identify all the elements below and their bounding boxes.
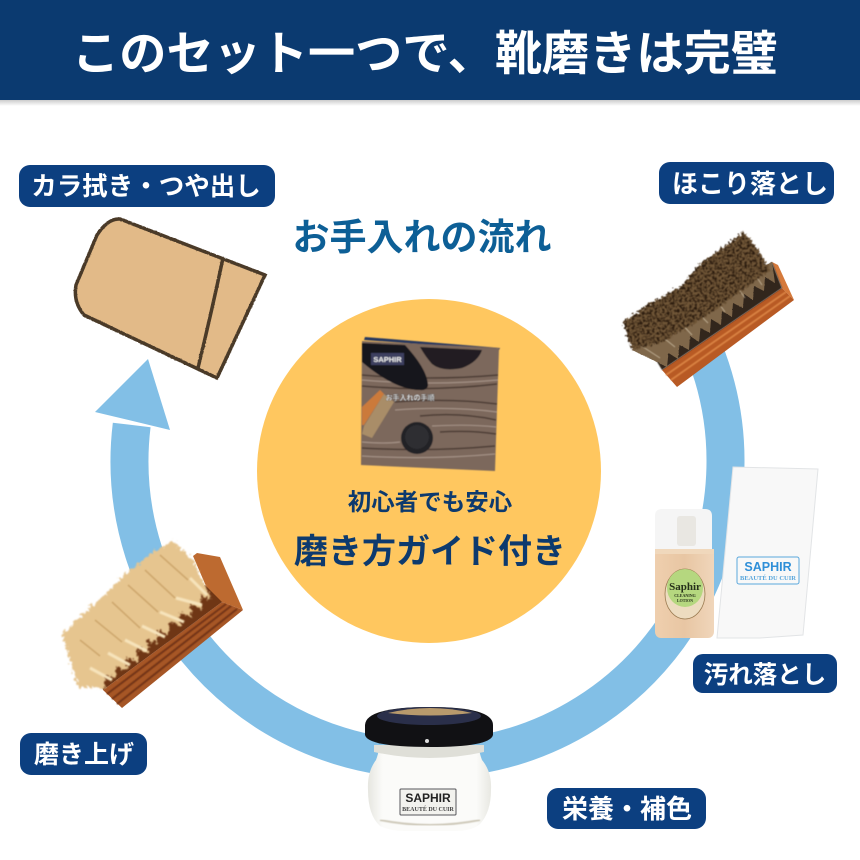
label: stain removal [693, 654, 837, 693]
guide booklet: SAPHIR [373, 355, 402, 364]
label: final buff [20, 733, 147, 775]
icon: bristle brush [62, 540, 243, 708]
guide circle [257, 299, 601, 643]
label: nourish and color: 栄養・補色 [562, 794, 692, 824]
icon: white cloth [717, 467, 818, 638]
guide caption [294, 489, 566, 571]
lotion label [665, 569, 705, 619]
icon: polishing mitt [75, 219, 265, 378]
label: polishing cloth: カラ拭き・つや出し [31, 173, 261, 201]
cloth logo: BEAUTÉ DU CUIR [740, 574, 796, 582]
header banner [0, 0, 860, 106]
jar label: BEAUTÉ DU CUIR [402, 805, 454, 813]
lotion label: Saphir [669, 581, 701, 593]
icon: cream jar [365, 707, 493, 831]
guide booklet: お手入れの手順 [386, 393, 434, 402]
label: polishing cloth [19, 165, 275, 207]
circular flow arrow [95, 350, 726, 759]
jar label [400, 789, 456, 815]
guide caption: 磨き方ガイド付き [294, 533, 566, 571]
flow heading: お手入れの流れ [292, 217, 552, 258]
lotion label: LOTION [677, 598, 693, 603]
label: final buff: 磨き上げ [34, 741, 134, 769]
label: dust removal: ほこり落とし [672, 169, 828, 199]
jar label: SAPHIR [405, 791, 451, 805]
icon: cleaning lotion bottle [655, 509, 714, 638]
guide caption: 初心者でも安心 [348, 489, 513, 515]
label: dust removal [659, 162, 834, 204]
lotion label: CLEANING [674, 593, 696, 598]
title: このセット一つで、靴磨きは完璧 [72, 27, 778, 80]
label: nourish and color [547, 788, 706, 829]
cloth logo: SAPHIR [744, 560, 792, 574]
icon: horsehair brush [623, 232, 794, 387]
label: stain removal: 汚れ落とし [704, 661, 826, 689]
guide booklet [361, 337, 500, 471]
cloth logo [737, 557, 799, 584]
